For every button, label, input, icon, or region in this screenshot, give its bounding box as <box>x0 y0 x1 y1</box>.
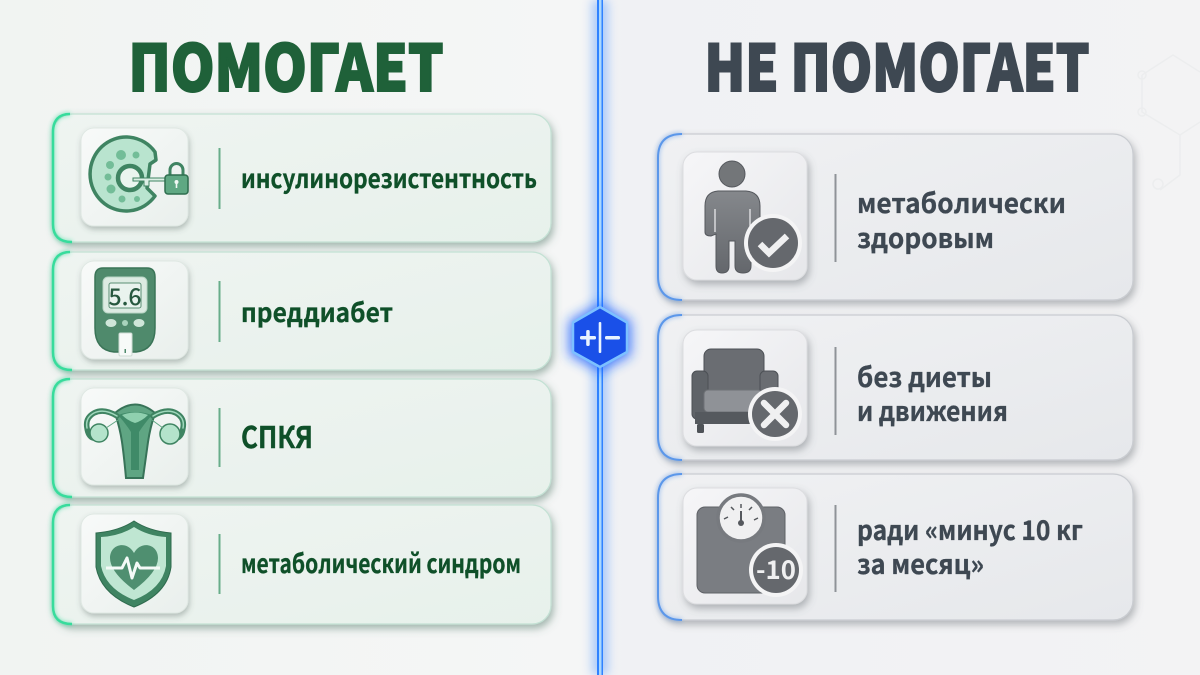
title: right: НЕ ПОМОГАЕТ <box>704 18 1090 110</box>
icon: scale with minus 10: -10 <box>756 550 796 587</box>
icon: shield with heart <box>81 514 188 613</box>
label: без диеты <box>857 356 992 395</box>
divider <box>834 347 836 435</box>
divider <box>218 408 220 467</box>
label: метаболический синдром <box>241 544 521 581</box>
card: инсулинорезистентность <box>53 114 551 242</box>
icon: uterus <box>81 388 188 485</box>
panel: помогает <box>53 114 551 624</box>
label: инсулинорезистентность <box>241 159 537 196</box>
card: ради минус 10 кг <box>658 474 1133 620</box>
card: СПКЯ <box>53 379 551 497</box>
divider <box>218 148 220 209</box>
label <box>857 182 1066 256</box>
icon: glucose meter: 5.6 <box>108 278 142 312</box>
card: преддиабет <box>53 252 551 370</box>
divider <box>834 505 836 592</box>
divider <box>218 281 220 342</box>
label <box>857 509 1083 582</box>
label: и движения <box>857 390 1008 429</box>
icon: person with check <box>683 152 807 280</box>
icon: glucose meter <box>81 261 188 359</box>
panel: не помогает <box>658 134 1133 620</box>
icon: scale with minus 10 <box>683 488 807 604</box>
label: преддиабет <box>241 293 393 330</box>
divider <box>218 534 220 594</box>
label: здоровым <box>857 217 994 256</box>
badge: plus minus hexagon <box>569 303 631 372</box>
label: за месяц» <box>857 543 984 582</box>
label <box>857 356 1008 429</box>
label: ради «минус 10 кг <box>857 509 1083 548</box>
decorative molecule pattern <box>1138 55 1200 190</box>
card: метаболический синдром <box>53 505 551 624</box>
card: метаболически здоровым <box>658 134 1133 300</box>
icon: armchair with cross <box>683 330 807 446</box>
label: метаболически <box>857 182 1066 221</box>
label: СПКЯ <box>241 413 313 457</box>
center divider line <box>592 0 608 675</box>
divider <box>834 174 836 262</box>
icon: cell with key and lock <box>81 128 188 226</box>
card: без диеты и движения <box>658 315 1133 460</box>
title: left: ПОМОГАЕТ <box>128 18 444 110</box>
